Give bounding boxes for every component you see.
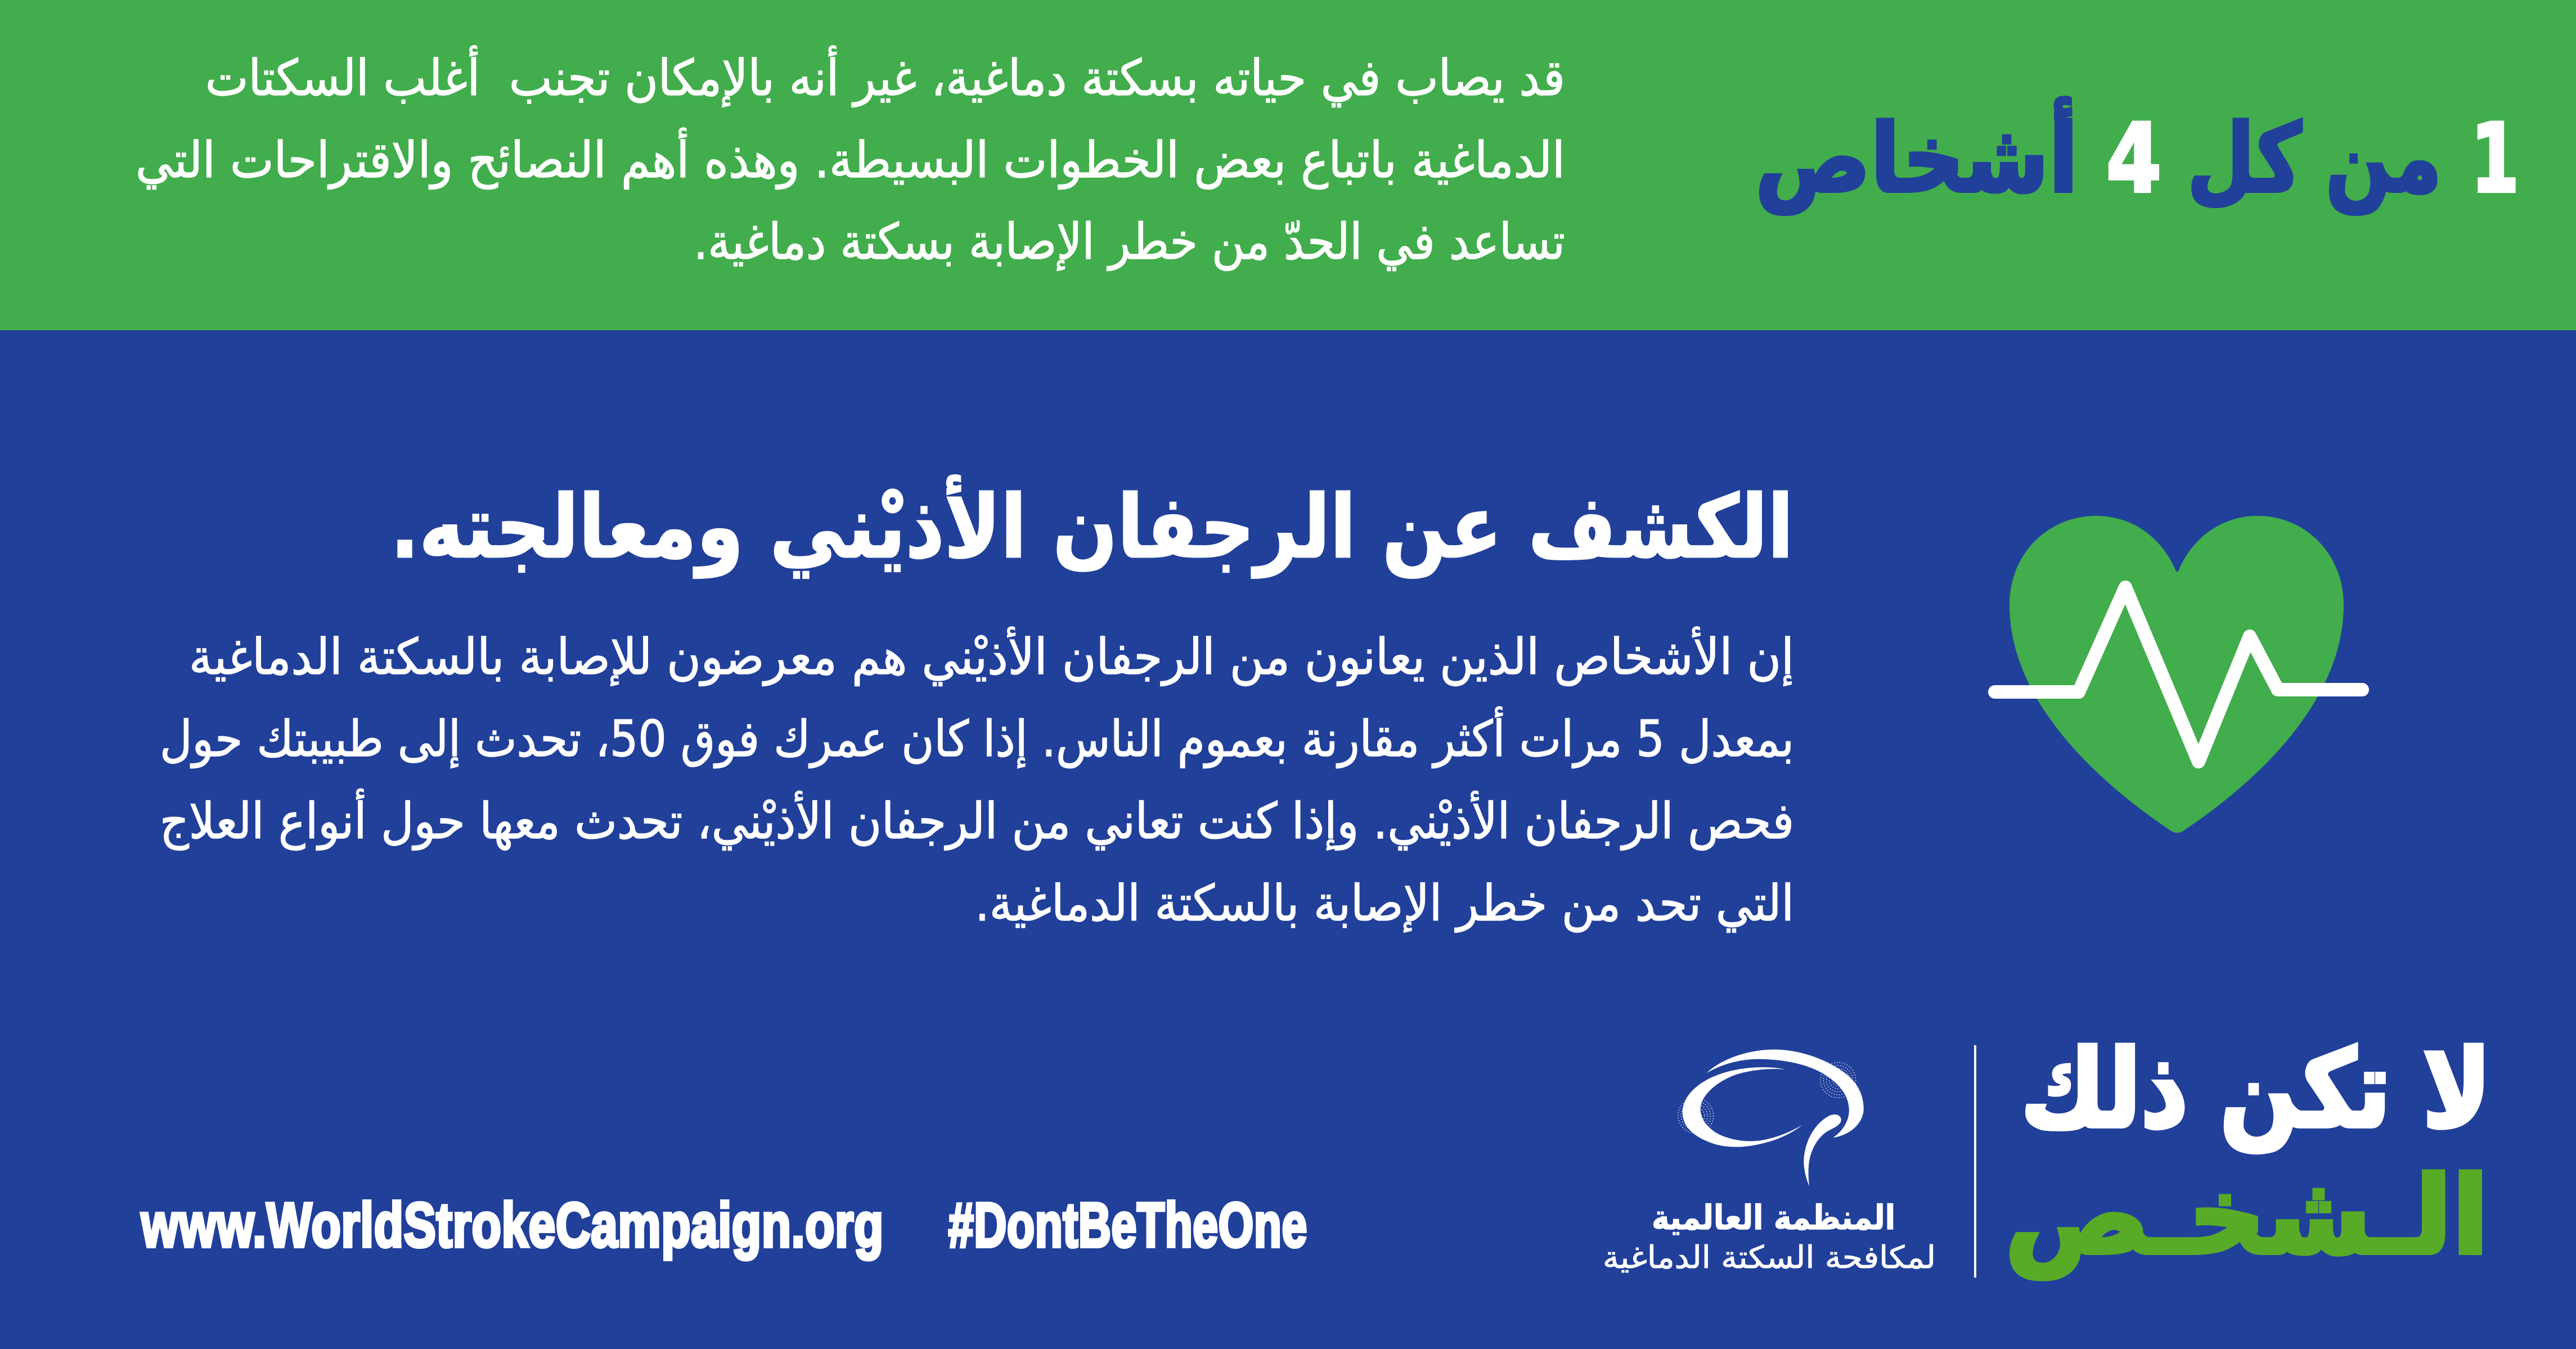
heading: 1 in 4 people <box>1755 97 2519 214</box>
icon: World Stroke Organization logo <box>1678 1050 1864 1186</box>
text block: body paragraph <box>160 627 1794 933</box>
icon: heart with pulse line <box>1995 516 2362 833</box>
slogan: don't be that person <box>2005 1027 2491 1279</box>
heading: 1 in 4 people: كل <box>2187 104 2301 214</box>
heading: detect and treat atrial fibrillation: الكشف عن الرجفان الأذيْني ومعالجته. <box>390 475 1793 578</box>
divider <box>1974 1045 1976 1278</box>
slogan: don't be that person: لا تكن ذلك <box>2021 1027 2491 1153</box>
text block: organization name: المنظمة العالمية <box>1652 1198 1895 1238</box>
slogan: don't be that person: الـشخـص <box>2005 1154 2489 1279</box>
text block: intro paragraph: قد يصاب في حياته بسكتة دماغية، غير أنه بالإمكان تجنب أغلب السكتات <box>205 46 1565 107</box>
text block: intro paragraph: الدماغية باتباع بعض الخطوات البسيطة. وهذه أهم النصائح والاقتراحات التي <box>136 128 1565 190</box>
heading: 1 in 4 people: من <box>2326 104 2442 214</box>
hashtag: #DontBeTheOne <box>948 1190 1307 1260</box>
panel: green top banner <box>0 0 2576 330</box>
text block: body paragraph: فحص الرجفان الأذيْني. وإذا كنت تعاني من الرجفان الأذيْني، تحدث معها حول أنواع العلاج <box>160 789 1794 851</box>
text block: intro paragraph <box>136 46 1565 271</box>
link: campaign website: www.WorldStrokeCampaign.org <box>141 1190 884 1260</box>
text block: body paragraph: بمعدل 5 مرات أكثر مقارنة بعموم الناس. إذا كان عمرك فوق 50، تحدث إلى طبيبتك حول <box>160 707 1794 768</box>
text block: body paragraph: التي تحد من خطر الإصابة بالسكتة الدماغية. <box>975 874 1794 933</box>
text block: organization name: لمكافحة السكتة الدماغية <box>1603 1239 1936 1275</box>
text block: organization name <box>1603 1198 1936 1275</box>
text block: body paragraph: إن الأشخاص الذين يعانون من الرجفان الأذيْني هم معرضون للإصابة بالسكتة الدماغية <box>189 627 1794 686</box>
text block: intro paragraph: تساعد في الحدّ من خطر الإصابة بسكتة دماغية. <box>694 213 1565 271</box>
heading: 1 in 4 people: أشخاص <box>1755 97 2078 214</box>
heading: 1 in 4 people: 4 <box>2106 104 2161 214</box>
heading: 1 in 4 people: 1 <box>2471 104 2519 214</box>
